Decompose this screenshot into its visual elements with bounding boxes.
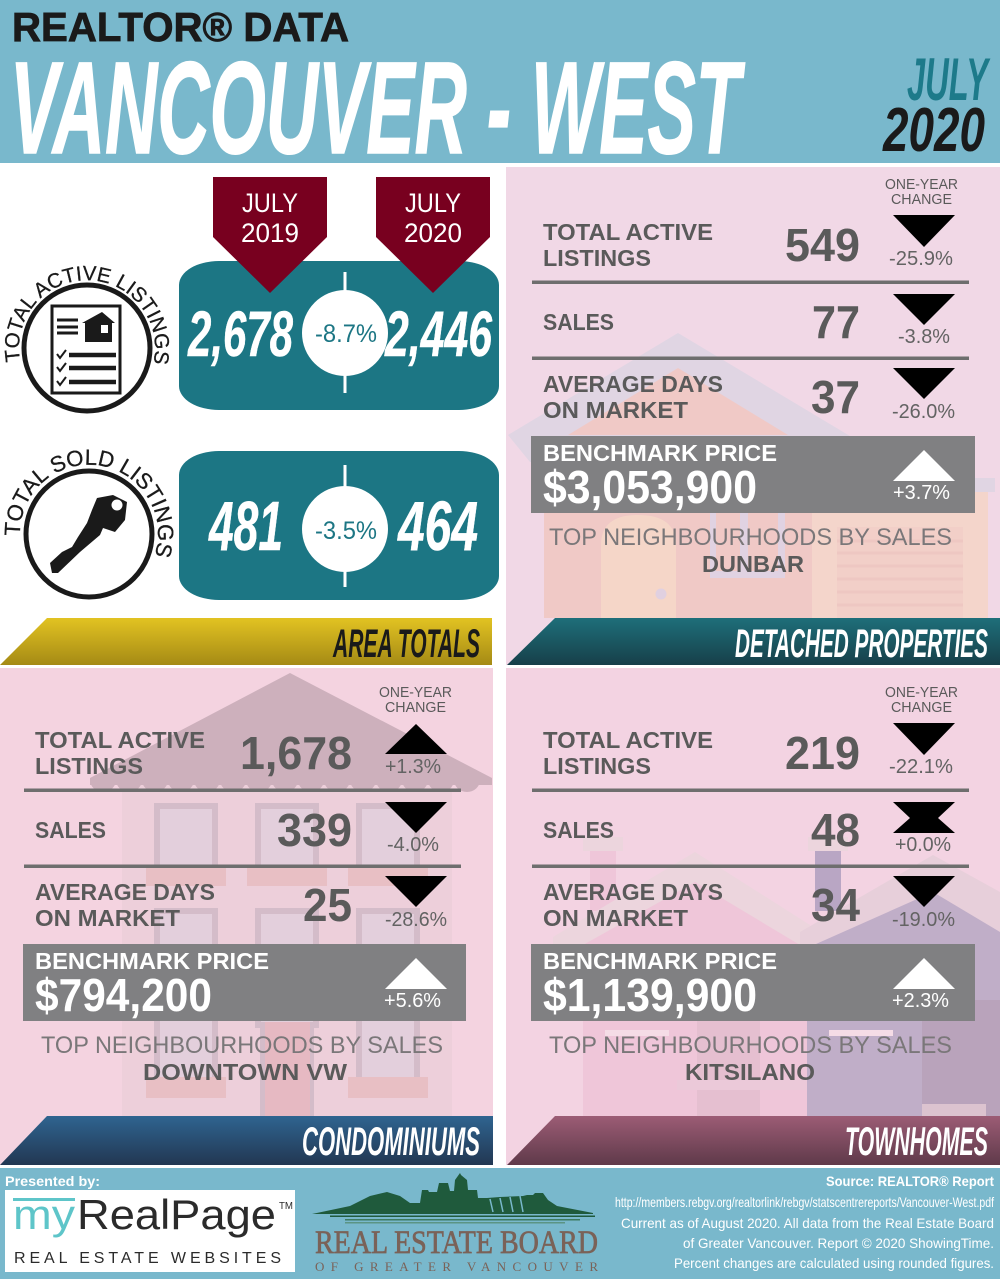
data: townhome stats [531,685,975,1085]
logo: real estate board: REAL ESTATE BOARD [315,1225,598,1261]
data: condo stats [23,685,466,1085]
data: detached stats: -3.8% [898,326,950,348]
data: detached stats: -25.9% [889,248,953,270]
data: detached stats [531,177,975,577]
data: condo stats: $794,200 [35,969,212,1021]
stat box: active listings: 2,446 [384,298,492,370]
stat box: sold listings: -3.5% [315,517,377,545]
logo: real estate board: OF GREATER VANCOUVER [315,1259,598,1274]
icon: active listings badge [4,266,170,414]
section band: area totals [0,618,492,666]
data: townhome stats: TOP NEIGHBOURHOODS BY SALES [549,1032,952,1059]
data: condo stats: CHANGE [385,700,446,716]
heading: realtor data: REALTOR® DATA [12,4,349,50]
data: townhome stats: 219 [785,727,860,779]
date marker: july 2020: 2020 [404,218,462,248]
data: detached stats: TOP NEIGHBOURHOODS BY SALES [549,524,952,551]
data: condo stats: 25 [303,879,352,931]
date marker: july 2019: 2019 [241,218,299,248]
data: condo stats: +1.3% [385,756,441,778]
logo: myrealpage: my [13,1191,75,1238]
footer [0,1168,1000,1279]
source notes: of Greater Vancouver. Report © 2020 ShowingTime. [683,1235,994,1251]
logo: real estate board [312,1173,598,1274]
data: condo stats: +5.6% [384,990,441,1012]
data: detached stats: ON MARKET [543,397,688,423]
data: condo stats: -28.6% [385,909,447,931]
data: detached stats: SALES [543,309,614,335]
logo: myrealpage: TM [279,1201,293,1212]
data: detached stats: LISTINGS [543,245,651,271]
data: condo stats: -4.0% [387,834,439,856]
source notes: Current as of August 2020. All data from the Real Estate Board [621,1215,994,1231]
icon: active listings badge: TOTAL ACTIVE LISTINGS [4,266,170,364]
logo: myrealpage: REAL ESTATE WEBSITES [14,1250,281,1267]
data: detached stats: +3.7% [893,482,950,504]
data: townhome stats: SALES [543,817,614,843]
data: condo stats: SALES [35,817,106,843]
date marker: july 2019 [213,177,327,293]
data: townhome stats: ON MARKET [543,905,688,931]
data: townhome stats: BENCHMARK PRICE [543,948,777,974]
data: detached stats: 77 [812,296,860,348]
data: condo stats: TOP NEIGHBOURHOODS BY SALES [41,1032,443,1059]
data: condo stats: ONE-YEAR [379,685,452,701]
data: detached stats: AVERAGE DAYS [543,371,723,397]
data: townhome stats: KITSILANO [685,1059,815,1085]
icon: sold listings badge [4,449,174,600]
stat box: active listings: 2,678 [187,298,293,370]
stat box: sold listings: 481 [208,487,283,565]
data: townhome stats: 48 [811,804,860,856]
stat box: active listings: -8.7% [315,320,377,348]
panel: condominiums [0,668,493,1165]
data: condo stats: AVERAGE DAYS [35,879,215,905]
stat box: active listings [179,261,499,410]
data: condo stats: 339 [277,804,352,856]
data: detached stats: 37 [811,371,860,423]
data: townhome stats: 34 [811,879,860,931]
data: detached stats: $3,053,900 [543,461,757,513]
data: detached stats: 549 [785,219,860,271]
data: condo stats: DOWNTOWN VW [143,1059,347,1085]
data: townhome stats: TOTAL ACTIVE [543,727,713,753]
date marker: july 2020 [376,177,490,293]
data: condo stats: TOTAL ACTIVE [35,727,205,753]
logo: myrealpage [5,1190,295,1272]
stat box: sold listings: 464 [397,487,478,565]
data: condo stats: 1,678 [240,727,352,779]
data: detached stats: -26.0% [892,401,955,423]
illustration: detached house [508,333,995,618]
section band: detached properties [507,618,1000,666]
data: condo stats: LISTINGS [35,753,143,779]
stat box: sold listings [179,451,499,600]
icon: sold listings badge: TOTAL SOLD LISTINGS [4,449,174,558]
logo: myrealpage: RealPage [77,1191,276,1238]
section band: area totals: AREA TOTALS [332,622,480,666]
data: detached stats: TOTAL ACTIVE [543,219,713,245]
section band: condominiums: CONDOMINIUMS [302,1120,480,1164]
data: townhome stats: CHANGE [891,700,952,716]
data: townhome stats: +0.0% [895,834,951,856]
data: townhome stats: -22.1% [889,756,953,778]
data: detached stats: BENCHMARK PRICE [543,440,777,466]
section band: condominiums [0,1116,493,1165]
data: townhome stats: $1,139,900 [543,969,757,1021]
data: condo stats: ON MARKET [35,905,180,931]
data: townhome stats: AVERAGE DAYS [543,879,723,905]
data: townhome stats: +2.3% [892,990,949,1012]
section band: townhomes [507,1116,1000,1165]
panel: detached properties [506,167,1000,666]
date marker: july 2020: JULY [405,188,461,218]
data: townhome stats: ONE-YEAR [885,685,958,701]
header banner [0,0,1000,181]
data: detached stats: ONE-YEAR [885,177,958,193]
date marker: july 2019: JULY [242,188,298,218]
data: townhome stats: LISTINGS [543,753,651,779]
panel: townhomes [506,668,1000,1165]
illustration: condo building [90,673,492,1116]
panel: area totals [0,177,499,666]
data: detached stats: CHANGE [891,192,952,208]
data: condo stats: BENCHMARK PRICE [35,948,269,974]
illustration: townhouses [553,837,1000,1116]
data: detached stats: DUNBAR [702,551,804,577]
presented by label: Presented by: [5,1173,100,1189]
source notes [615,1173,994,1271]
data: townhome stats: -19.0% [892,909,955,931]
